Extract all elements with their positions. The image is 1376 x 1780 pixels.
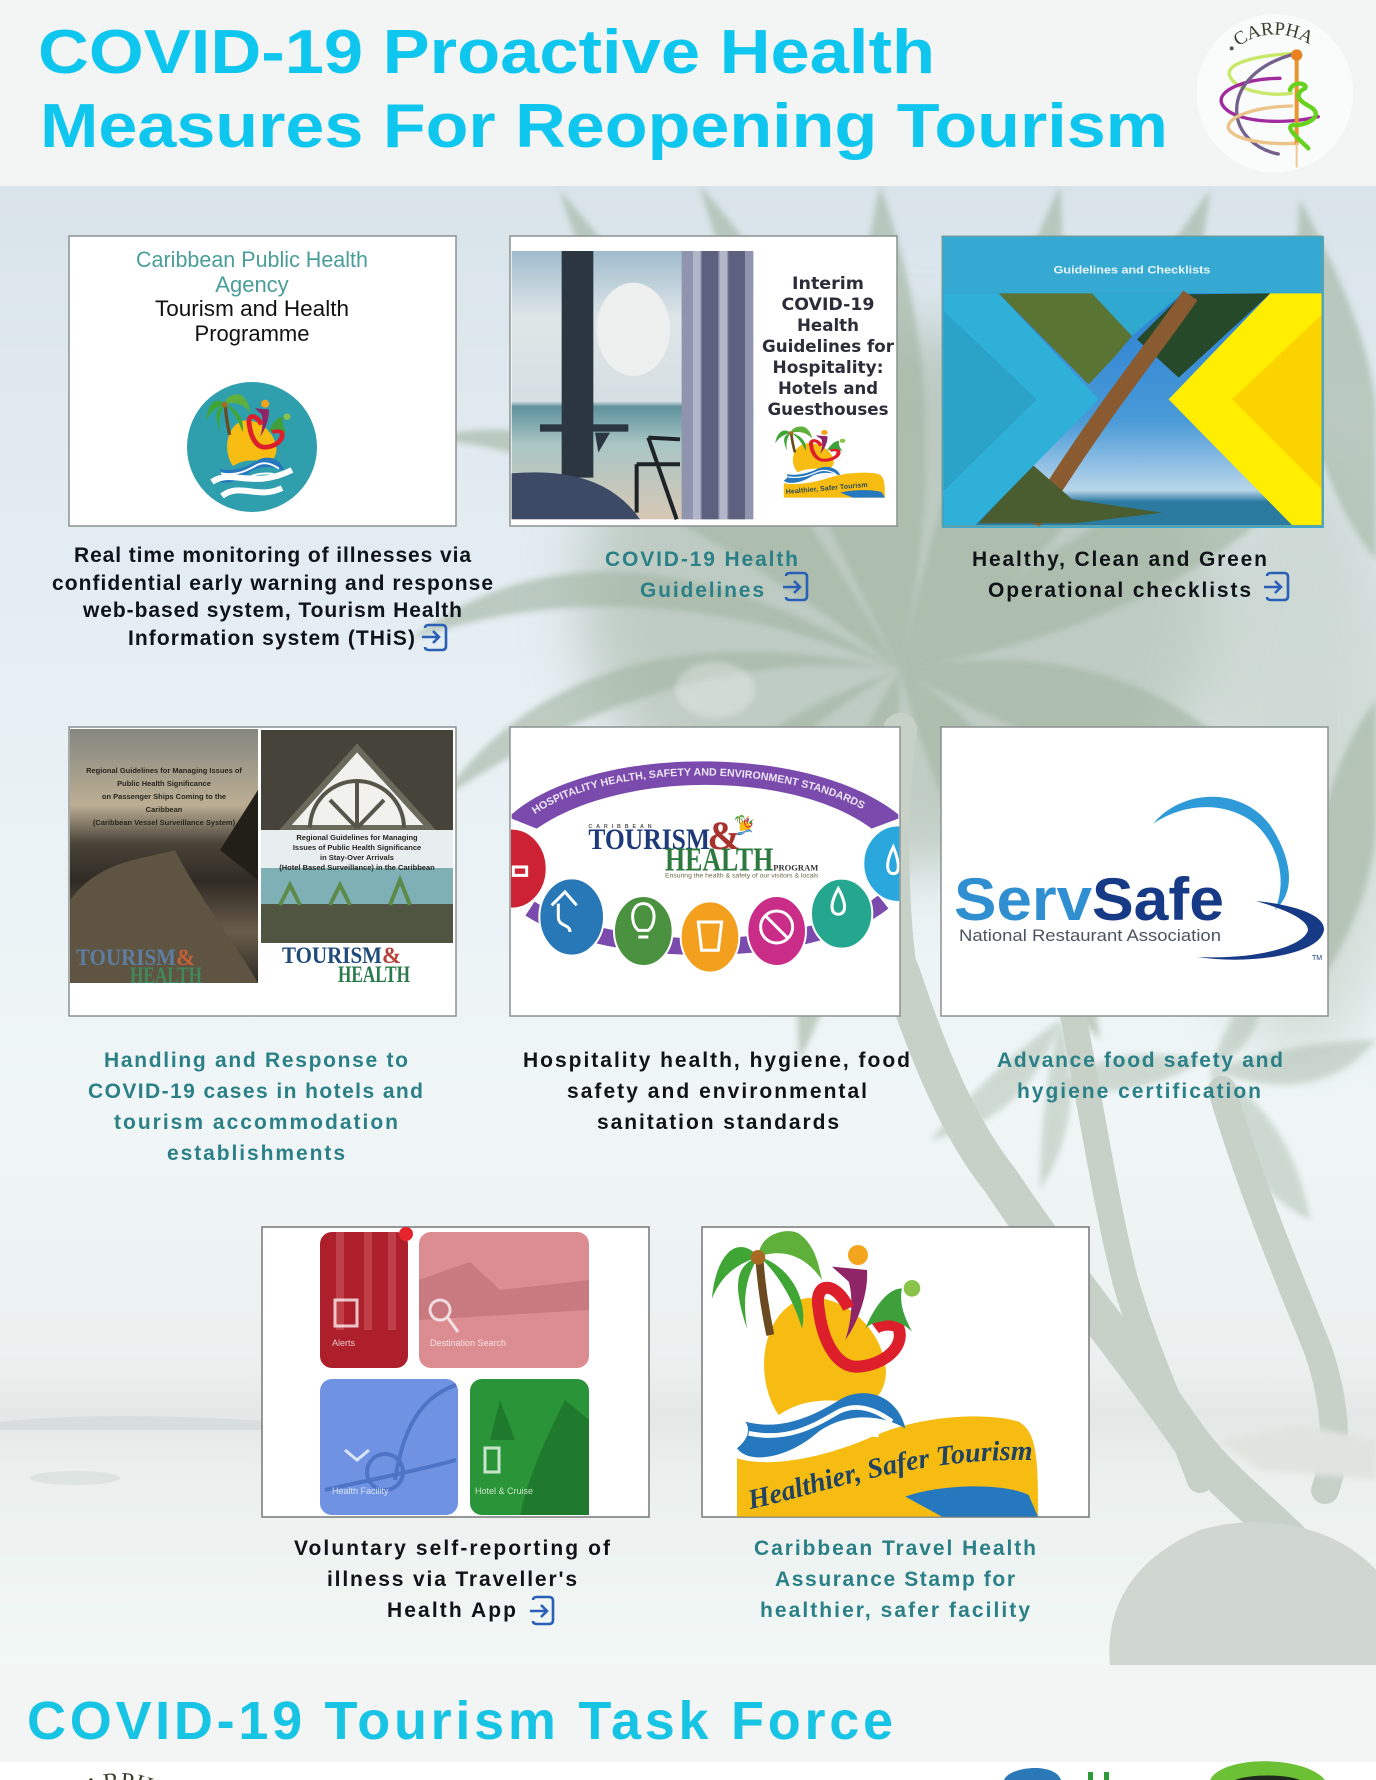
card: ServSafe logo (941, 727, 1328, 1016)
card: regional guidelines covers: (Hotel Based Surveillance) in the Caribbean (279, 863, 435, 872)
card: interim health guidelines (510, 236, 897, 526)
title: COVID-19 Proactive Health (38, 18, 935, 87)
card: interim health guidelines: Health (797, 316, 859, 336)
logo: CARPHA: CARPHA (1234, 22, 1310, 44)
icon: link (530, 1597, 553, 1624)
title: Measures For Reopening Tourism (40, 92, 1168, 161)
caption: advance food safety (997, 1049, 1283, 1103)
card: interim health guidelines: Guesthouses (768, 400, 888, 420)
card: regional guidelines covers: TOURISM (76, 945, 176, 970)
footer logos (89, 1761, 1325, 1780)
icon: link (1264, 573, 1288, 600)
caption: advance food safety: Advance food safety and (997, 1049, 1283, 1072)
card: Tourism and Health Programme: Agency (215, 272, 289, 297)
card: traveller's health app tiles (262, 1227, 649, 1517)
heading: task force: COVID-19 Tourism Task Force (27, 1691, 893, 1751)
caption: real time monitoring (52, 544, 493, 650)
footer band (0, 1665, 1376, 1762)
caption: handling and response: COVID-19 cases in hotels and (88, 1080, 423, 1103)
card: traveller's health app tiles: Alerts (332, 1338, 356, 1348)
caption: handling and response: establishments (167, 1142, 345, 1165)
card: Healthier, Safer Tourism stamp: Healthier, Safer Tourism (749, 1440, 1032, 1510)
caption: handling and response: tourism accommodation (114, 1111, 398, 1134)
card: Healthier, Safer Tourism stamp (701, 1226, 1090, 1518)
card: regional guidelines covers: Regional Guidelines for Managing (296, 833, 418, 842)
card: ServSafe logo: TM (1312, 955, 1322, 962)
card: interim health guidelines: Healthier, Safer Tourism (786, 482, 868, 496)
caption: real time monitoring: confidential early warning and response (52, 572, 493, 595)
caption: COVID-19 Health Guidelines: Guidelines (640, 579, 764, 602)
card: regional guidelines covers (69, 727, 456, 1016)
card: regional guidelines covers: HEALTH (338, 962, 410, 987)
card: hospitality standards: HOSPITALITY HEALTH, SAFETY AND ENVIRONMENT STANDARDS (532, 768, 865, 814)
title (38, 18, 1168, 161)
card: regional guidelines covers: & (176, 945, 195, 970)
caption: real time monitoring: Real time monitoring of illnesses via (74, 544, 471, 567)
card: hospitality standards: Ensuring the health & safety of our visitors & locals (665, 874, 818, 880)
caption: voluntary self-reporting: illness via Traveller's (327, 1568, 577, 1591)
card: regional guidelines covers: in Stay-Over Arrivals (320, 853, 394, 862)
card: hospitality standards: HEALTH (665, 841, 773, 878)
card: interim health guidelines: COVID-19 (782, 295, 874, 315)
caption: travel health stamp (754, 1537, 1036, 1622)
card: traveller's health app tiles: Health Facility (332, 1486, 389, 1496)
header band (0, 0, 1376, 186)
card: regional guidelines covers: on Passenger Ships Coming to the (102, 792, 226, 801)
caption: real time monitoring: Information system (THiS) (128, 627, 415, 650)
caption: real time monitoring: web-based system, Tourism Health (82, 599, 462, 622)
card: hospitality standards: TOURISM (588, 823, 710, 856)
card: ServSafe logo: Serv (954, 866, 1093, 933)
caption: healthy clean and green: Operational checklists (988, 579, 1251, 602)
card: guidelines and checklists: Guidelines and Checklists (1054, 264, 1210, 276)
caption: hospitality health: safety and environmental (567, 1080, 867, 1103)
card: regional guidelines covers: Caribbean (146, 805, 183, 814)
card: interim health guidelines: Hotels and (778, 379, 878, 399)
card: Tourism and Health Programme: Tourism and Health (155, 296, 349, 321)
caption: voluntary self-reporting (294, 1537, 611, 1622)
card: hospitality standards: CARIBBEAN (588, 824, 652, 830)
caption: COVID-19 Health Guidelines (605, 548, 798, 602)
caption: healthy clean and green (972, 548, 1267, 602)
caption: hospitality health (523, 1049, 910, 1134)
card: Tourism and Health Programme: Programme (195, 321, 309, 346)
card: traveller's health app tiles: Destination Search (430, 1338, 506, 1348)
card: regional guidelines covers: Issues of Public Health Significance (293, 843, 421, 852)
logo: CARPHA (1219, 22, 1320, 168)
icon: link (422, 625, 446, 650)
caption: voluntary self-reporting: Health App (387, 1599, 516, 1622)
card: regional guidelines covers: Public Health Significance (117, 779, 211, 788)
card: regional guidelines covers: & (382, 943, 401, 968)
card: interim health guidelines: Guidelines for (762, 337, 895, 357)
card: regional guidelines covers: (Caribbean Vessel Surveillance System) (93, 818, 236, 827)
caption: travel health stamp: healthier, safer facility (760, 1599, 1030, 1622)
caption: advance food safety: hygiene certification (1017, 1080, 1261, 1103)
icon: link (783, 573, 807, 600)
card: interim health guidelines: Interim (792, 274, 864, 294)
card: Tourism and Health Programme (69, 236, 456, 526)
card: traveller's health app tiles: Hotel & Cruise (475, 1486, 533, 1496)
card: regional guidelines covers: HEALTH (130, 963, 202, 988)
caption: travel health stamp: Caribbean Travel Health (754, 1537, 1036, 1560)
card: interim health guidelines: Hospitality: (772, 358, 884, 378)
caption: handling and response: Handling and Response to (104, 1049, 408, 1072)
caption: healthy clean and green: Healthy, Clean and Green (972, 548, 1267, 571)
caption: hospitality health: sanitation standards (597, 1111, 839, 1134)
card: hospitality standards: PROGRAM (773, 862, 818, 872)
card: Tourism and Health Programme: Caribbean Public Health (136, 247, 368, 272)
caption: hospitality health: Hospitality health, hygiene, food (523, 1049, 910, 1072)
caption: travel health stamp: Assurance Stamp for (775, 1568, 1015, 1591)
card: ServSafe logo: Safe (1092, 866, 1224, 933)
caption: handling and response (88, 1049, 423, 1165)
caption: COVID-19 Health Guidelines: COVID-19 Health (605, 548, 798, 571)
card: ServSafe logo: National Restaurant Association (959, 926, 1221, 945)
card: regional guidelines covers: TOURISM (282, 943, 382, 968)
card: guidelines and checklists (942, 236, 1324, 528)
card: regional guidelines covers: Regional Guidelines for Managing Issues of (86, 766, 242, 775)
caption: voluntary self-reporting: Voluntary self-reporting of (294, 1537, 611, 1560)
card: hospitality standards: & (707, 813, 741, 858)
card: hospitality standards (509, 726, 901, 1017)
